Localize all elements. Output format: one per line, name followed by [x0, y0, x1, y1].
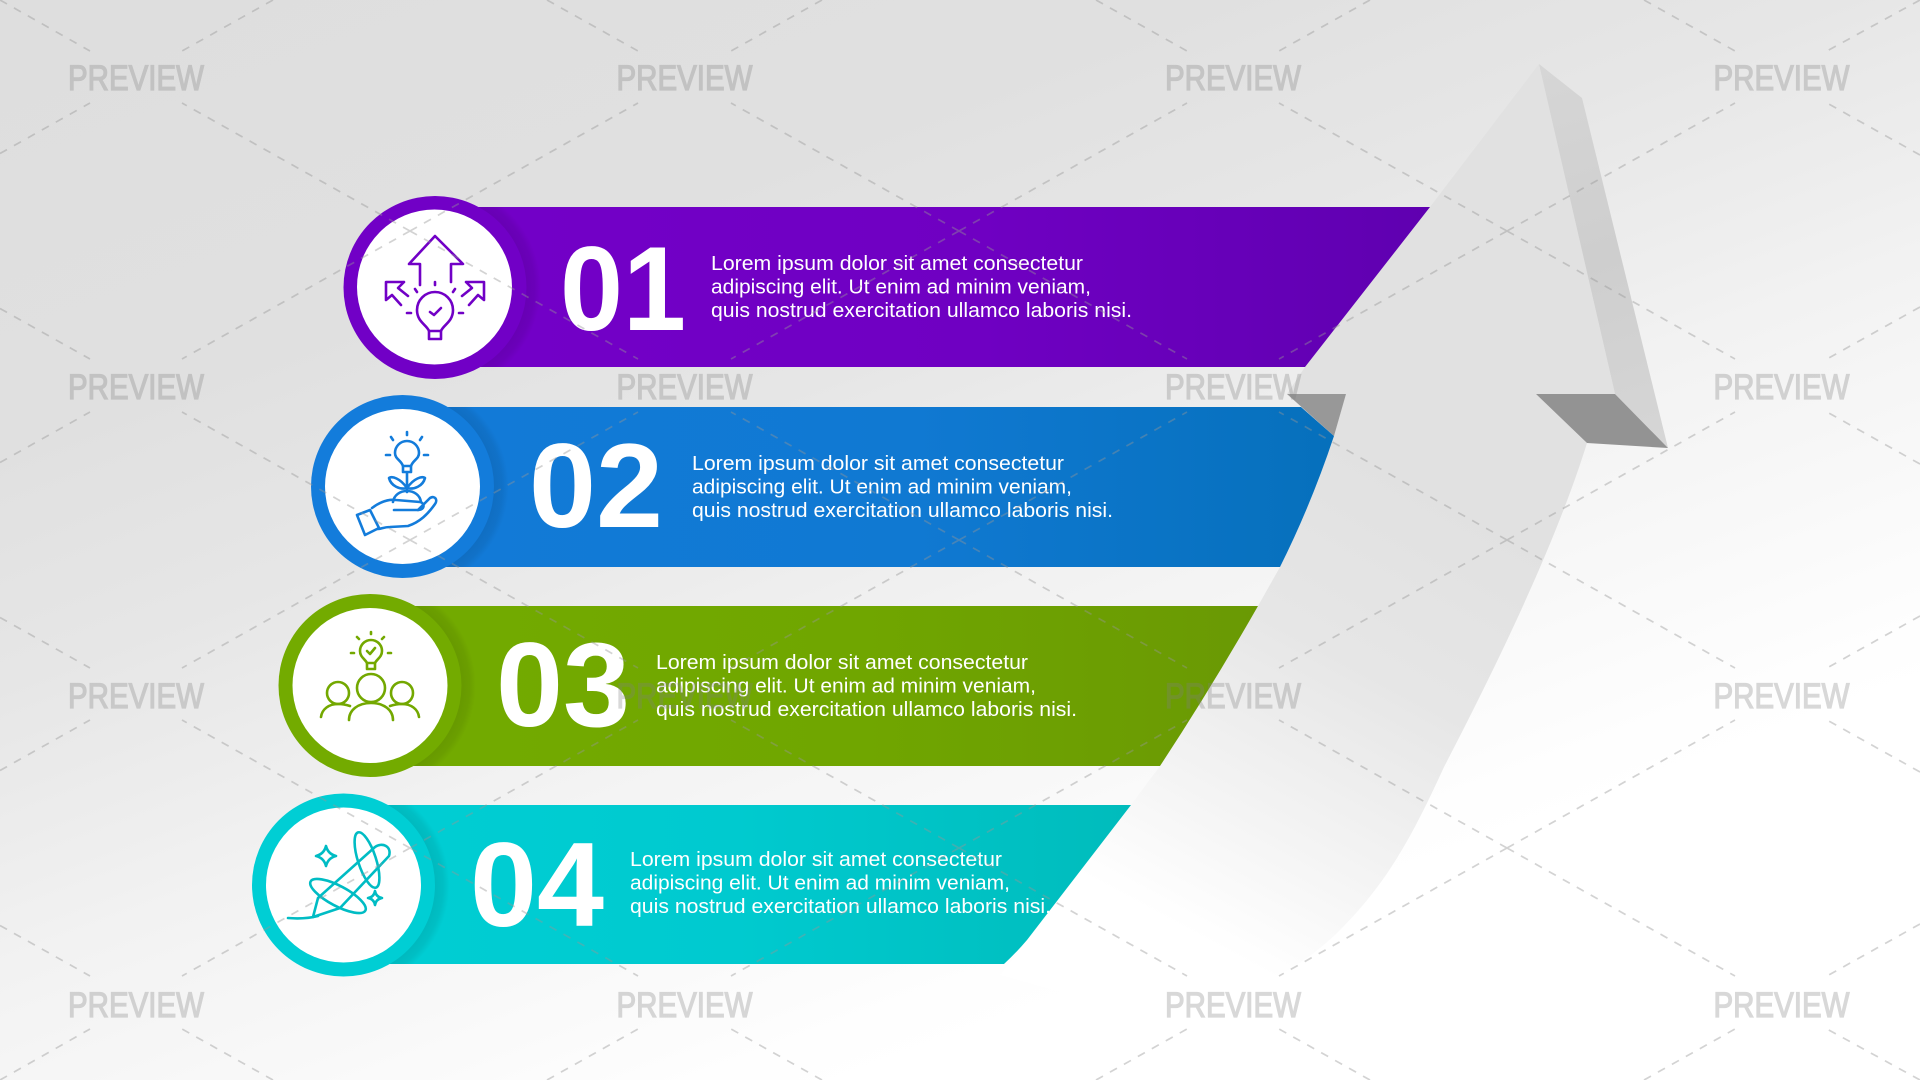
arrow left underside [1287, 394, 1346, 436]
text block 2 [692, 452, 1113, 522]
band 2: blue [311, 394, 1346, 578]
number 04: 04 [470, 818, 604, 952]
icon: team with bulb [321, 632, 419, 720]
band 3 ring [278, 594, 462, 777]
text block 2: adipiscing elit. Ut enim ad minim veniam, [692, 476, 1072, 498]
text block 1: Lorem ipsum dolor sit amet consectetur [711, 252, 1083, 275]
band 1 ring [344, 196, 526, 379]
watermark grid: PREVIEW [616, 986, 752, 1025]
band 3 soft shadow [414, 606, 472, 766]
number 03: 03 [496, 618, 630, 752]
watermark grid: PREVIEW [68, 677, 204, 716]
watermark grid: PREVIEW [1714, 59, 1850, 98]
icon: hand with plant and bulb [357, 432, 436, 535]
watermark grid: PREVIEW [616, 59, 752, 98]
band 2 soft shadow [446, 407, 505, 567]
band 1: purple [344, 196, 1430, 379]
text block 4 [630, 848, 1051, 918]
text block 3 [656, 651, 1077, 721]
text block 1 [711, 252, 1132, 322]
watermark grid: PREVIEW [616, 368, 752, 407]
watermark grid: PREVIEW [1165, 368, 1301, 407]
icon: pencil with orbits and sparkles [288, 830, 390, 919]
text block 2: Lorem ipsum dolor sit amet consectetur [692, 452, 1064, 475]
band 1 ribbon [435, 207, 1430, 367]
band 4: teal [252, 794, 1131, 976]
number 02: 02 [529, 419, 663, 553]
watermark grid: PREVIEW [1714, 368, 1850, 407]
watermark grid: PREVIEW [68, 986, 204, 1025]
3D arrow [1000, 64, 1668, 1000]
band 1 white disc [357, 210, 512, 364]
text block 4: adipiscing elit. Ut enim ad minim veniam, [630, 872, 1010, 894]
band 4 white disc [266, 808, 421, 962]
watermark grid: PREVIEW [1165, 59, 1301, 98]
watermark grid: PREVIEW [1714, 677, 1850, 716]
band 2 ring [311, 395, 494, 578]
icon: bulb with arrows [386, 236, 484, 339]
text block 3: Lorem ipsum dolor sit amet consectetur [656, 651, 1028, 674]
text block 1: quis nostrud exercitation ullamco laboris nisi. [711, 299, 1132, 322]
text block 4: Lorem ipsum dolor sit amet consectetur [630, 848, 1002, 871]
band 3: green [278, 594, 1258, 777]
arrow front face [1000, 64, 1615, 1000]
text block 3: quis nostrud exercitation ullamco laboris nisi. [656, 698, 1077, 721]
band 1 soft shadow [479, 207, 537, 367]
watermark grid: PREVIEW [68, 59, 204, 98]
arrow right side face [1539, 64, 1668, 448]
arrow right underside [1536, 394, 1668, 448]
text block 1: adipiscing elit. Ut enim ad minim veniam, [711, 276, 1091, 298]
watermark grid: PREVIEW [68, 368, 204, 407]
text block 4: quis nostrud exercitation ullamco laboris nisi. [630, 895, 1051, 918]
band 3 ribbon [370, 606, 1258, 766]
band 2 ribbon [402, 407, 1334, 567]
band 3 white disc [292, 608, 448, 763]
number 01: 01 [560, 222, 686, 356]
band 2 white disc [325, 409, 480, 564]
text block 2: quis nostrud exercitation ullamco laboris nisi. [692, 499, 1113, 522]
band 4 ribbon [343, 805, 1131, 964]
band 4 ring [252, 794, 435, 976]
watermark grid: PREVIEW [1714, 986, 1850, 1025]
text block 3: adipiscing elit. Ut enim ad minim veniam, [656, 674, 1036, 698]
watermark grid: PREVIEW [1165, 677, 1301, 716]
band 4 soft shadow [388, 805, 446, 964]
watermark grid: PREVIEW [616, 677, 752, 716]
watermark grid: PREVIEW [1165, 986, 1301, 1025]
